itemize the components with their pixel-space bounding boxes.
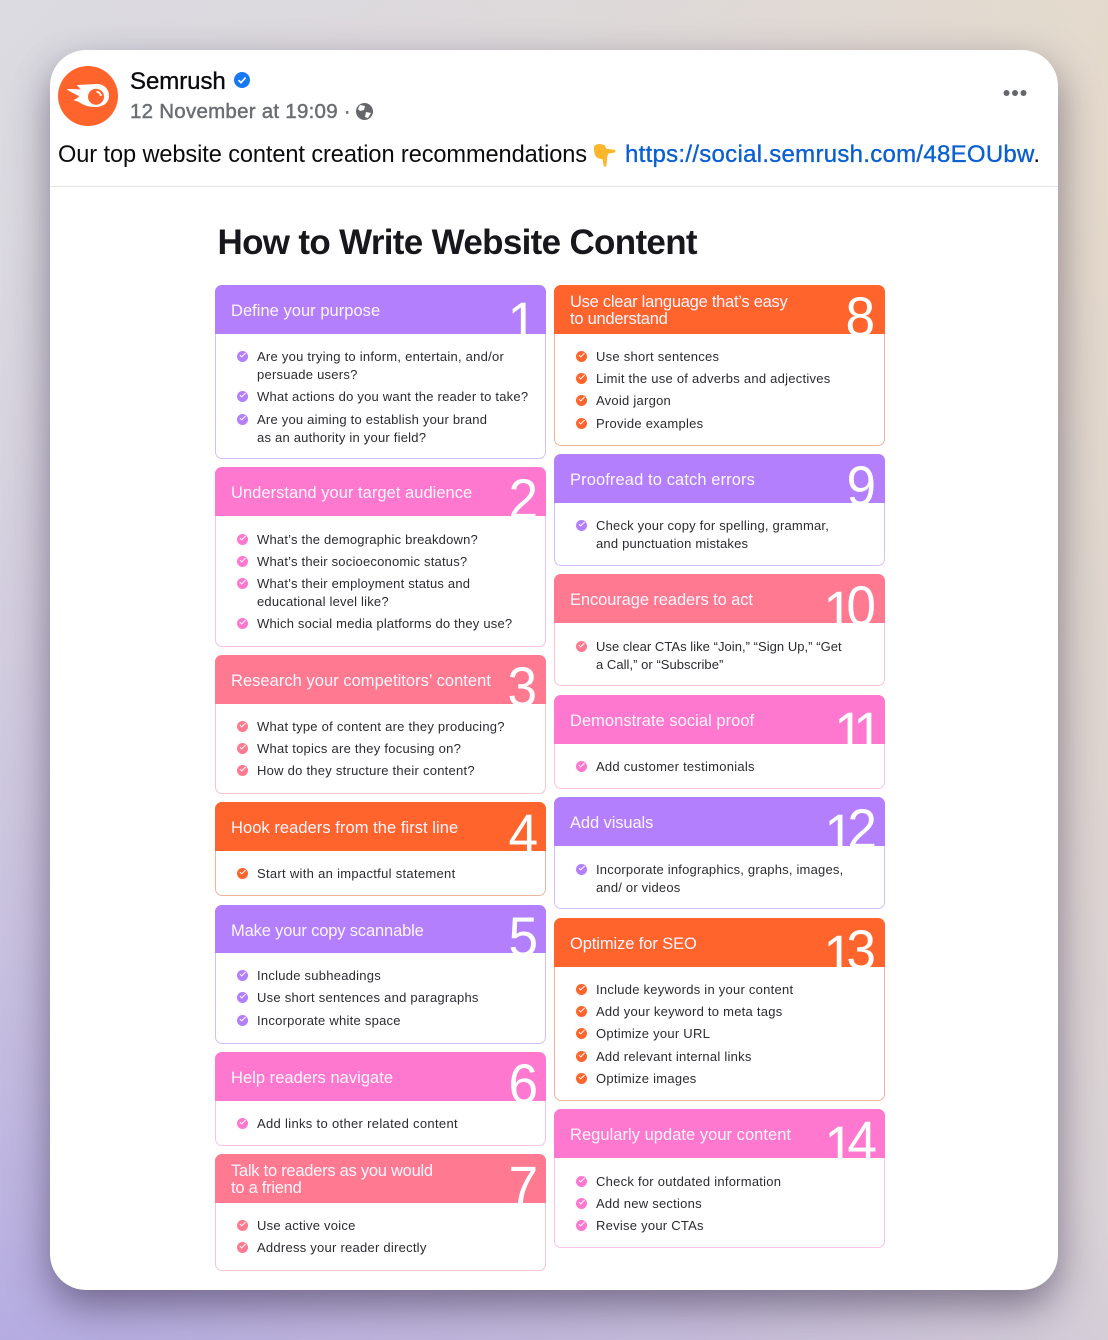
panel: step 14 update content: Revise your CTAs bbox=[596, 1218, 704, 1233]
panel: step 13 optimize for SEO: Optimize your URL bbox=[596, 1026, 710, 1041]
panel: step 10 encourage readers bbox=[554, 574, 885, 686]
timestamp: 12 November at 19:09 · bbox=[130, 100, 351, 123]
panel: step 3 competitors: What topics are they focusing on? bbox=[257, 741, 461, 756]
panel: step 5 scannable copy bbox=[215, 905, 546, 1044]
panel: step 1 define your purpose: Are you trying to inform, entertain, and/or bbox=[257, 349, 504, 364]
panel: step 8 clear language: Use clear language that’s easy bbox=[570, 293, 788, 311]
panel: step 5 scannable copy: Use short sentences and paragraphs bbox=[257, 990, 479, 1005]
panel: step 5 scannable copy: Incorporate white space bbox=[257, 1013, 401, 1028]
panel: step 6 help readers navigate: Help readers navigate bbox=[231, 1068, 393, 1086]
panel: step 8 clear language: Use short sentences bbox=[596, 349, 719, 364]
panel: step 10 encourage readers: a Call,” or “Subscribe” bbox=[596, 657, 723, 672]
panel: step 5 scannable copy: Make your copy scannable bbox=[231, 922, 424, 940]
panel: step 13 optimize for SEO: Optimize images bbox=[596, 1071, 697, 1086]
panel: step 12 add visuals bbox=[554, 797, 885, 909]
panel: step 13 optimize for SEO bbox=[554, 918, 885, 1101]
panel: step 7 talk to readers: to a friend bbox=[231, 1179, 302, 1197]
icon: more menu bbox=[1004, 90, 1026, 96]
icon: verified badge bbox=[234, 72, 250, 88]
panel: step 2 target audience: educational level like? bbox=[257, 594, 389, 609]
panel: step 1 define your purpose: persuade users? bbox=[257, 367, 358, 382]
panel: step 12 add visuals: and/ or videos bbox=[596, 880, 680, 895]
panel: step 5 scannable copy: Include subheadings bbox=[257, 968, 381, 983]
panel: step 1 define your purpose: as an authority in your field? bbox=[257, 430, 426, 445]
panel: step 13 optimize for SEO: Include keywords in your content bbox=[596, 982, 793, 997]
panel: step 2 target audience: Understand your target audience bbox=[231, 484, 472, 502]
panel: step 8 clear language: Limit the use of adverbs and adjectives bbox=[596, 371, 830, 386]
panel: step 11 social proof: Demonstrate social proof bbox=[570, 712, 754, 730]
panel: step 10 encourage readers: Use clear CTAs like “Join,” “Sign Up,” “Get bbox=[596, 639, 842, 654]
post link: https://social.semrush.com/48EOUbw. bbox=[625, 141, 1040, 168]
panel: step 11 social proof: Add customer testimonials bbox=[596, 759, 755, 774]
panel: step 14 update content bbox=[554, 1109, 885, 1248]
panel: step 1 define your purpose bbox=[215, 285, 546, 459]
title: How to Write Website Content bbox=[218, 223, 697, 262]
panel: step 4 hook readers: Start with an impactful statement bbox=[257, 866, 455, 881]
panel: step 2 target audience bbox=[215, 467, 546, 647]
panel: step 7 talk to readers: Talk to readers as you would bbox=[231, 1162, 433, 1180]
panel: step 2 target audience: What’s their socioeconomic status? bbox=[257, 554, 467, 569]
icon: pointing hand emoji bbox=[594, 144, 616, 166]
panel: step 9 proofread bbox=[554, 454, 885, 566]
panel: step 13 optimize for SEO: Add relevant internal links bbox=[596, 1049, 752, 1064]
panel: step 13 optimize for SEO: Optimize for SEO bbox=[570, 934, 697, 952]
panel: step 8 clear language: Avoid jargon bbox=[596, 393, 671, 408]
panel: step 1 define your purpose: Define your purpose bbox=[231, 302, 380, 320]
panel: step 1 define your purpose: What actions do you want the reader to take? bbox=[257, 389, 528, 404]
panel: step 9 proofread: and punctuation mistakes bbox=[596, 536, 748, 551]
panel: step 7 talk to readers: Use active voice bbox=[257, 1218, 356, 1233]
panel: step 10 encourage readers: Encourage readers to act bbox=[570, 590, 753, 608]
panel: step 3 competitors: How do they structure their content? bbox=[257, 763, 475, 778]
panel: step 9 proofread: Check your copy for spelling, grammar, bbox=[596, 518, 829, 533]
post caption: Our top website content creation recommendations bbox=[58, 142, 587, 168]
panel: step 1 define your purpose: Are you aiming to establish your brand bbox=[257, 412, 487, 427]
panel: step 14 update content: Add new sections bbox=[596, 1196, 702, 1211]
panel: step 6 help readers navigate: Add links to other related content bbox=[257, 1116, 458, 1131]
panel: step 12 add visuals: Add visuals bbox=[570, 814, 653, 832]
panel: step 3 competitors: Research your competitors’ content bbox=[231, 672, 491, 690]
panel: step 3 competitors bbox=[215, 655, 546, 794]
panel: step 12 add visuals: Incorporate infographics, graphs, images, bbox=[596, 862, 843, 877]
panel: step 3 competitors: What type of content are they producing? bbox=[257, 719, 505, 734]
panel: step 7 talk to readers: Address your reader directly bbox=[257, 1240, 427, 1255]
panel: step 2 target audience: What’s the demographic breakdown? bbox=[257, 532, 478, 547]
panel: step 6 help readers navigate bbox=[215, 1052, 546, 1146]
panel: step 2 target audience: What’s their employment status and bbox=[257, 576, 470, 591]
avatar: Semrush logo bbox=[58, 66, 118, 126]
panel: step 9 proofread: Proofread to catch errors bbox=[570, 470, 755, 488]
panel: step 2 target audience: Which social media platforms do they use? bbox=[257, 616, 512, 631]
icon: globe bbox=[356, 103, 373, 120]
panel: step 8 clear language: Provide examples bbox=[596, 416, 703, 431]
panel: step 7 talk to readers bbox=[215, 1154, 546, 1271]
panel: step 8 clear language: to understand bbox=[570, 310, 668, 328]
panel: step 4 hook readers bbox=[215, 802, 546, 896]
panel: step 14 update content: Check for outdated information bbox=[596, 1174, 781, 1189]
page name: Semrush bbox=[130, 68, 226, 95]
panel: step 14 update content: Regularly update your content bbox=[570, 1126, 791, 1144]
panel: step 4 hook readers: Hook readers from the first line bbox=[231, 818, 458, 836]
panel: step 8 clear language bbox=[554, 285, 885, 446]
panel: step 11 social proof bbox=[554, 695, 885, 789]
panel: step 13 optimize for SEO: Add your keyword to meta tags bbox=[596, 1004, 782, 1019]
